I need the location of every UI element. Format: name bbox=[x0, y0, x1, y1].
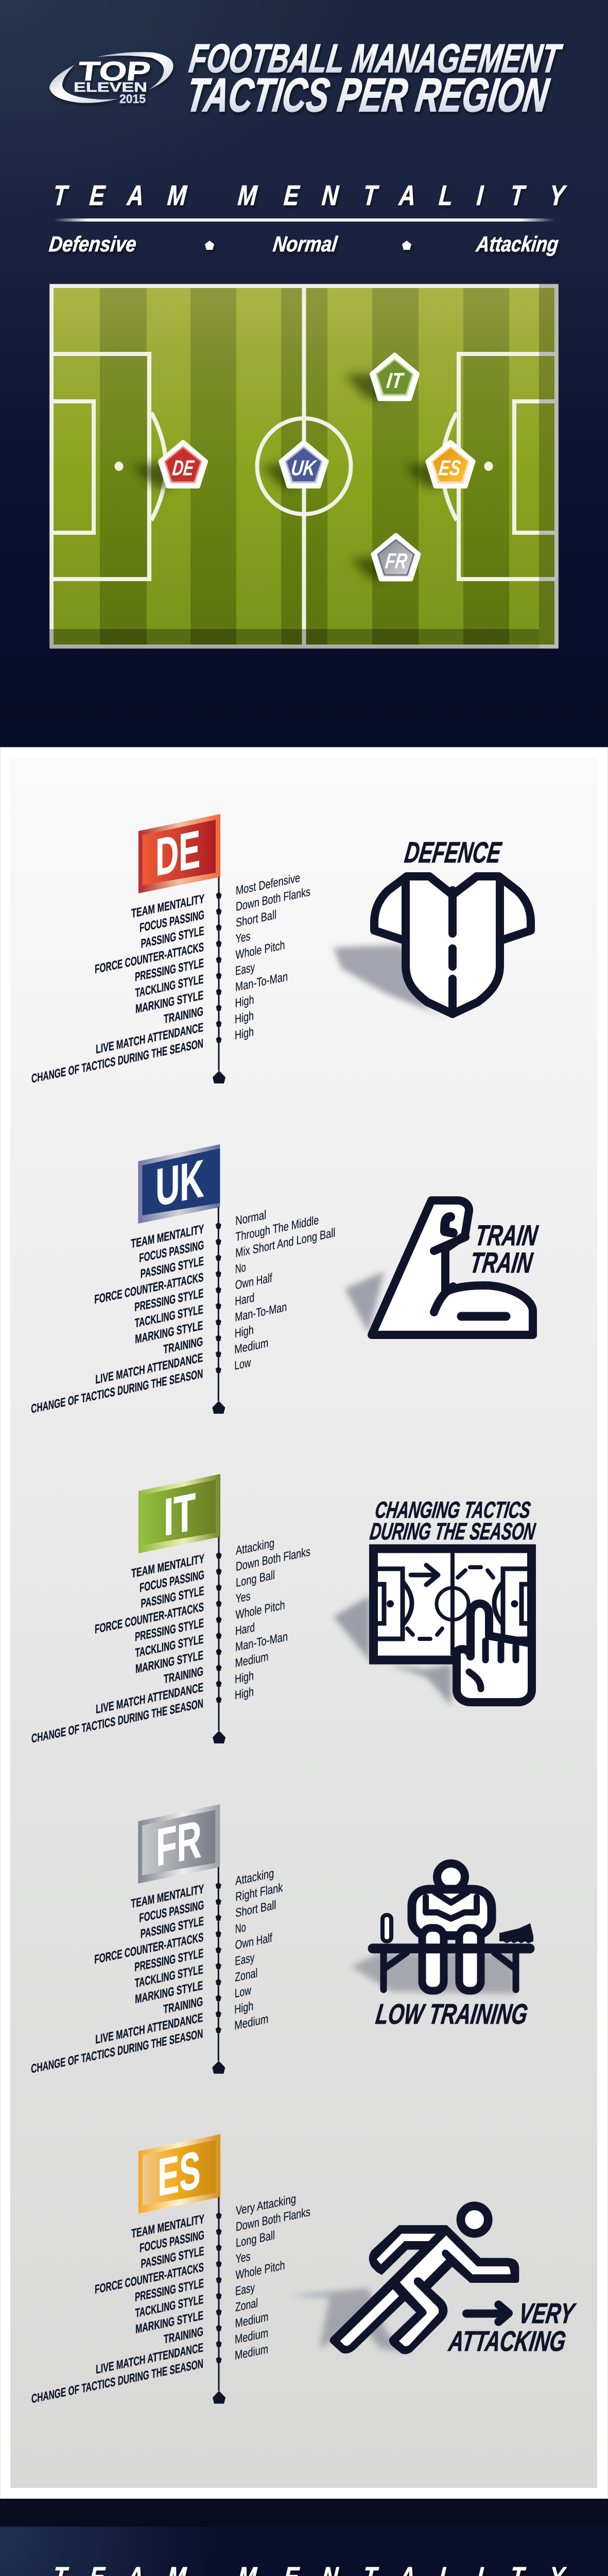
row values: High bbox=[235, 1009, 254, 1027]
row values: Zonal bbox=[235, 2296, 258, 2315]
row labels: FORCE COUNTER-ATTACKS bbox=[95, 940, 204, 976]
heading: team mentality: TEAM MENTALITY bbox=[52, 179, 568, 211]
row labels: LIVE MATCH ATTENDANCE bbox=[96, 1681, 203, 1717]
row labels: PRESSING STYLE bbox=[134, 1946, 203, 1974]
badge: FR: FR bbox=[384, 549, 409, 573]
row labels: FOCUS PASSING bbox=[140, 1568, 204, 1595]
row values: Whole Pitch bbox=[236, 2259, 285, 2282]
heading: changing tactics bbox=[369, 1497, 537, 1545]
row labels: TACKLING STYLE bbox=[135, 1962, 203, 1991]
heading: train train bbox=[468, 1219, 540, 1279]
row labels: TRAINING bbox=[164, 2325, 203, 2347]
row values: Yes bbox=[236, 1589, 250, 1606]
row labels: CHANGE OF TACTICS DURING THE SEASON bbox=[31, 1037, 203, 1086]
row labels: CHANGE OF TACTICS DURING THE SEASON bbox=[31, 2027, 203, 2076]
row values: Medium bbox=[235, 1650, 268, 1670]
row values: Easy bbox=[235, 1951, 255, 1969]
row values: Medium bbox=[234, 2012, 268, 2033]
row labels: PASSING STYLE bbox=[141, 1584, 204, 1611]
row values: High bbox=[235, 1025, 254, 1043]
row values: Normal bbox=[235, 1208, 266, 1228]
row labels: CHANGE OF TACTICS DURING THE SEASON bbox=[31, 1367, 203, 1416]
row labels: TEAM MENTALITY bbox=[131, 2212, 204, 2241]
flag: FR: FR bbox=[156, 1809, 201, 1877]
row values: Most Defensive bbox=[236, 871, 300, 898]
row values: No bbox=[235, 1920, 246, 1936]
flag: ES bbox=[138, 2134, 220, 2213]
row labels: FORCE COUNTER-ATTACKS bbox=[95, 2260, 204, 2297]
row labels: TACKLING STYLE bbox=[135, 2293, 204, 2320]
row values: Easy bbox=[235, 960, 255, 978]
panel: ES tactics bbox=[31, 2134, 310, 2406]
row labels: FOCUS PASSING bbox=[139, 1238, 204, 1265]
row values: Yes bbox=[236, 2249, 250, 2266]
heading: low training: LOW TRAINING bbox=[374, 1998, 530, 2030]
icon: tactics board with hand bbox=[334, 1549, 532, 1706]
row labels: FOCUS PASSING bbox=[140, 908, 204, 935]
flag: UK: UK bbox=[155, 1149, 204, 1217]
row labels: PASSING STYLE bbox=[141, 2244, 204, 2271]
row values: Whole Pitch bbox=[236, 938, 285, 962]
row values: Man-To-Man bbox=[235, 970, 288, 994]
row values: Down Both Flanks bbox=[236, 1545, 310, 1574]
flag: FR bbox=[138, 1804, 220, 1884]
row labels: MARKING STYLE bbox=[135, 2309, 203, 2336]
heading: defence: DEFENCE bbox=[403, 836, 503, 869]
row labels: TACKLING STYLE bbox=[135, 1632, 204, 1660]
row labels: TRAINING bbox=[164, 1665, 203, 1686]
row values: High bbox=[234, 1999, 253, 2017]
row labels: TACKLING STYLE bbox=[135, 1302, 203, 1331]
row values: Zonal bbox=[235, 1966, 257, 1985]
row labels: PRESSING STYLE bbox=[135, 956, 204, 984]
icon: training machine bbox=[345, 1200, 533, 1335]
row labels: TRAINING bbox=[163, 1995, 203, 2016]
row labels: LIVE MATCH ATTENDANCE bbox=[96, 2341, 203, 2377]
flag: IT: IT bbox=[164, 1482, 196, 1547]
row labels: TEAM MENTALITY bbox=[131, 1882, 204, 1911]
row values: Short Ball bbox=[235, 1898, 276, 1920]
badge: ES: ES bbox=[438, 456, 462, 480]
badge: UK bbox=[281, 443, 326, 486]
row labels: MARKING STYLE bbox=[135, 1319, 203, 1347]
pole with markers bbox=[212, 1867, 225, 2074]
row labels bbox=[31, 2212, 204, 2406]
row labels: TRAINING bbox=[164, 1005, 203, 1026]
row labels: FOCUS PASSING bbox=[140, 2228, 204, 2256]
badge: DE: DE bbox=[171, 456, 196, 480]
row values: Easy bbox=[235, 2281, 255, 2298]
row labels bbox=[31, 892, 204, 1086]
row labels: LIVE MATCH ATTENDANCE bbox=[96, 1021, 203, 1057]
heading: changing tactics: CHANGING TACTICS bbox=[374, 1497, 532, 1523]
top eleven logo bbox=[49, 52, 173, 106]
row values: High bbox=[235, 1669, 254, 1687]
row values: Hard bbox=[235, 1291, 254, 1309]
mentality legend: Normal bbox=[272, 232, 339, 256]
row labels: PASSING STYLE bbox=[141, 1914, 204, 1941]
row values: No bbox=[235, 1260, 246, 1276]
row labels: MARKING STYLE bbox=[135, 989, 203, 1016]
row values bbox=[235, 1529, 310, 1703]
arrow bbox=[466, 2304, 509, 2322]
pole with markers bbox=[212, 1207, 225, 1414]
row values: Attacking bbox=[235, 1867, 274, 1888]
row labels: CHANGE OF TACTICS DURING THE SEASON bbox=[31, 1697, 203, 1746]
pole with markers bbox=[213, 877, 225, 1083]
row values: Low bbox=[234, 1355, 251, 1373]
mentality legend: Attacking bbox=[475, 232, 560, 256]
top eleven logo: 2015 bbox=[119, 92, 146, 106]
row labels bbox=[31, 1552, 204, 1746]
panel: IT tactics bbox=[31, 1474, 310, 1746]
row values: Whole Pitch bbox=[236, 1598, 285, 1622]
row values: Right Flank bbox=[235, 1880, 283, 1904]
row values: Down Both Flanks bbox=[236, 885, 310, 914]
row labels: PRESSING STYLE bbox=[134, 1286, 203, 1314]
row values bbox=[234, 1194, 335, 1373]
row values: Medium bbox=[234, 1336, 268, 1357]
row labels bbox=[31, 1222, 204, 1416]
row labels: FORCE COUNTER-ATTACKS bbox=[94, 1270, 203, 1307]
row values: Short Ball bbox=[236, 908, 276, 930]
row labels: FORCE COUNTER-ATTACKS bbox=[95, 1600, 204, 1636]
mentality legend bbox=[48, 232, 560, 256]
flag: UK bbox=[138, 1144, 220, 1224]
row labels: FOCUS PASSING bbox=[139, 1898, 204, 1925]
row values: Man-To-Man bbox=[235, 1630, 288, 1654]
row values bbox=[235, 2189, 310, 2363]
row values: Long Ball bbox=[236, 2228, 275, 2250]
row values: Attacking bbox=[236, 1536, 274, 1558]
row values: Yes bbox=[236, 929, 250, 946]
mentality legend: Defensive bbox=[48, 232, 138, 256]
icon: player at desk bbox=[351, 1863, 533, 1994]
icon: running player bbox=[289, 2206, 519, 2354]
row labels: MARKING STYLE bbox=[135, 1649, 203, 1676]
top eleven logo: TOP bbox=[77, 57, 152, 87]
badge: UK: UK bbox=[290, 456, 318, 480]
panel: UK tactics bbox=[31, 1144, 335, 1416]
badge: FR bbox=[373, 535, 419, 579]
flag: IT bbox=[138, 1474, 220, 1553]
row values: High bbox=[235, 1323, 254, 1341]
football pitch bbox=[49, 284, 559, 649]
heading: train train: TRAIN bbox=[468, 1246, 535, 1279]
row values: Low bbox=[235, 1984, 251, 2001]
row labels: LIVE MATCH ATTENDANCE bbox=[95, 2011, 203, 2047]
row values: Own Half bbox=[235, 1271, 272, 1293]
flag: ES: ES bbox=[158, 2140, 201, 2207]
row values: Man-To-Man bbox=[235, 1300, 287, 1325]
row labels: PASSING STYLE bbox=[141, 1255, 204, 1281]
panel: FR tactics bbox=[31, 1804, 283, 2076]
row labels: TEAM MENTALITY bbox=[131, 1222, 204, 1251]
title bbox=[183, 36, 565, 122]
row values bbox=[235, 869, 310, 1043]
row labels: CHANGE OF TACTICS DURING THE SEASON bbox=[31, 2357, 203, 2406]
row values: Medium bbox=[235, 2310, 268, 2331]
row values: Down Both Flanks bbox=[236, 2205, 310, 2234]
row labels: FORCE COUNTER-ATTACKS bbox=[94, 1930, 203, 1967]
row values: Own Half bbox=[235, 1931, 272, 1953]
heading: very attacking: VERY bbox=[517, 2297, 578, 2329]
row values: Very Attacking bbox=[236, 2192, 296, 2218]
row values: Through The Middle bbox=[235, 1213, 319, 1244]
row labels: PRESSING STYLE bbox=[135, 1616, 204, 1644]
row values: Medium bbox=[235, 2342, 268, 2363]
row labels: MARKING STYLE bbox=[135, 1979, 203, 2007]
badge: DE bbox=[161, 443, 206, 486]
pole with markers bbox=[213, 1537, 225, 1743]
panel: DE tactics bbox=[31, 814, 531, 1086]
badge: ES bbox=[428, 443, 473, 486]
row values: Long Ball bbox=[236, 1568, 275, 1590]
row values: Medium bbox=[235, 2326, 268, 2347]
heading: very attacking bbox=[446, 2297, 578, 2357]
row labels: TRAINING bbox=[163, 1335, 203, 1357]
pole with markers bbox=[213, 2197, 225, 2404]
row labels: TEAM MENTALITY bbox=[131, 892, 204, 921]
top eleven logo: ELEVEN bbox=[74, 79, 147, 95]
flag: DE bbox=[138, 814, 220, 893]
icon: shirt bbox=[334, 876, 531, 1019]
badge: IT: IT bbox=[385, 368, 406, 393]
badge shadows bbox=[131, 374, 440, 581]
flag: DE: DE bbox=[155, 819, 200, 887]
row labels: TEAM MENTALITY bbox=[131, 1552, 204, 1581]
row values bbox=[234, 1865, 283, 2033]
row values: Mix Short And Long Ball bbox=[235, 1226, 335, 1260]
row labels: PASSING STYLE bbox=[141, 924, 204, 951]
row values: Hard bbox=[235, 1620, 255, 1638]
row values: High bbox=[235, 1685, 254, 1703]
heading: train train: TRAIN bbox=[473, 1219, 540, 1251]
row labels: LIVE MATCH ATTENDANCE bbox=[95, 1351, 203, 1387]
row labels: PRESSING STYLE bbox=[135, 2277, 204, 2304]
row labels: TACKLING STYLE bbox=[135, 972, 204, 1001]
badge: IT bbox=[372, 355, 417, 399]
row values: High bbox=[235, 993, 254, 1010]
row labels bbox=[31, 1882, 204, 2076]
